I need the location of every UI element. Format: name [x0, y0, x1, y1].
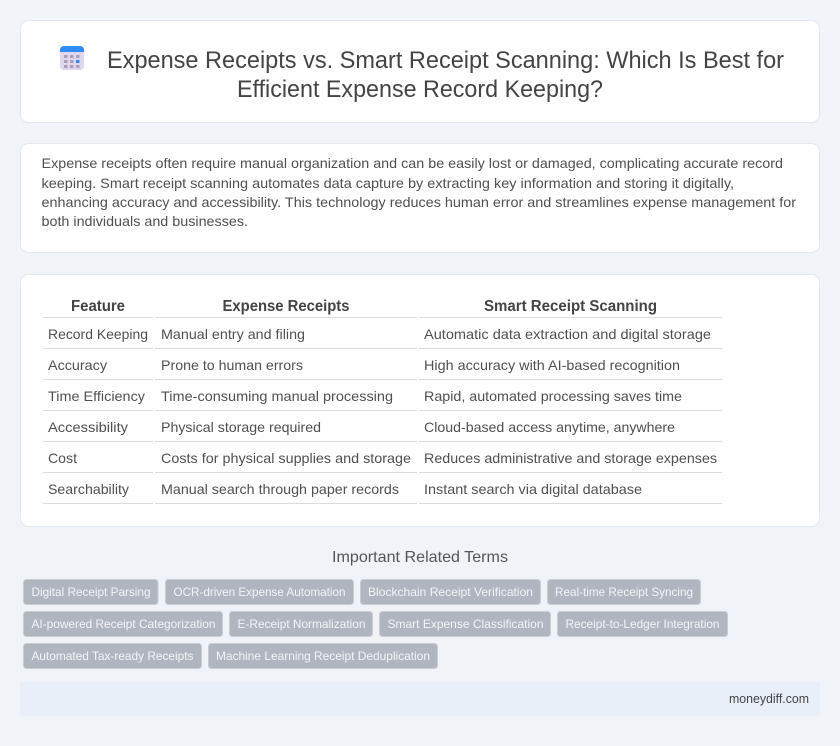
tag: [24, 612, 222, 636]
tag: Real-time Receipt Syncing: [555, 585, 693, 599]
icon: calendar: [60, 46, 84, 70]
table row: cost: [43, 450, 722, 472]
tag: [558, 612, 728, 636]
related terms tags: [24, 580, 728, 668]
tag: [548, 580, 700, 604]
table row: searchability: Manual search through paper records: [161, 481, 399, 497]
text block: description: [42, 155, 796, 229]
tag: Automated Tax-ready Receipts: [32, 649, 194, 663]
table row: accessibility: [43, 419, 722, 442]
tag: [24, 644, 202, 668]
table row: time efficiency: Time Efficiency: [48, 388, 145, 404]
title: Efficient Expense Record Keeping?: [237, 76, 603, 103]
tag: [360, 580, 540, 604]
table header row: [43, 298, 722, 318]
table row: cost: Reduces administrative and storage expenses: [424, 450, 717, 466]
tag: [24, 580, 158, 604]
table row: record keeping: Automatic data extraction and digital storage: [424, 326, 711, 342]
table row: accessibility: Physical storage required: [161, 419, 321, 435]
tag: [166, 580, 354, 604]
table header row: Feature: [71, 298, 125, 315]
panel: title header: [20, 20, 820, 122]
tag: Digital Receipt Parsing: [32, 585, 150, 599]
text block: description: both individuals and businesses.: [42, 213, 248, 229]
table row: time efficiency: Time-consuming manual processing: [161, 388, 393, 404]
tag: E-Receipt Normalization: [238, 617, 366, 631]
table row: accuracy: [43, 357, 722, 380]
table row: accuracy: High accuracy with AI-based recognition: [424, 357, 680, 373]
title: Expense Receipts vs. Smart Receipt Scanning: Which Is Best for: [107, 47, 784, 74]
footer: site name: moneydiff.com: [729, 691, 809, 706]
table row: searchability: [43, 481, 722, 504]
table header row: Smart Receipt Scanning: [484, 298, 657, 315]
text block: description: keeping. Smart receipt scanning automates data capture by extracting key information and storing it digitally,: [42, 175, 734, 191]
table row: accessibility: Cloud-based access anytime, anywhere: [424, 419, 675, 435]
table row: record keeping: Record Keeping: [48, 326, 148, 342]
table row: accuracy: Accuracy: [48, 357, 107, 373]
table row: record keeping: Manual entry and filing: [161, 326, 305, 342]
table row: searchability: Searchability: [48, 481, 129, 497]
panel: description: [20, 144, 820, 252]
tag: OCR-driven Expense Automation: [174, 585, 346, 599]
table row: searchability: Instant search via digital database: [424, 481, 642, 497]
tag: [380, 612, 550, 636]
tag: AI-powered Receipt Categorization: [32, 617, 216, 631]
table header row: Expense Receipts: [222, 298, 350, 315]
tag: [208, 644, 438, 668]
table row: accuracy: Prone to human errors: [161, 357, 303, 373]
tag: Blockchain Receipt Verification: [368, 585, 533, 599]
table row: time efficiency: [43, 388, 722, 410]
title: [107, 47, 784, 103]
text block: description: Expense receipts often require manual organization and can be easily lost or damaged, complicating accurate record: [42, 155, 783, 171]
table row: accessibility: Accessibility: [48, 419, 128, 435]
table row: record keeping: [43, 326, 722, 348]
table row: time efficiency: Rapid, automated processing saves time: [424, 388, 682, 404]
heading: important related terms: Important Related Terms: [332, 549, 508, 566]
table row: cost: Costs for physical supplies and storage: [161, 450, 411, 466]
text block: description: enhancing accuracy and accessibility. This technology reduces human error and streamlines expense management for: [42, 194, 796, 210]
tag: Receipt-to-Ledger Integration: [566, 617, 720, 631]
panel: comparison table: [20, 274, 820, 526]
table row: cost: Cost: [48, 450, 77, 466]
tag: [230, 612, 372, 636]
tag: Smart Expense Classification: [388, 617, 544, 631]
tag: Machine Learning Receipt Deduplication: [216, 649, 430, 663]
footer bar: [20, 682, 820, 716]
